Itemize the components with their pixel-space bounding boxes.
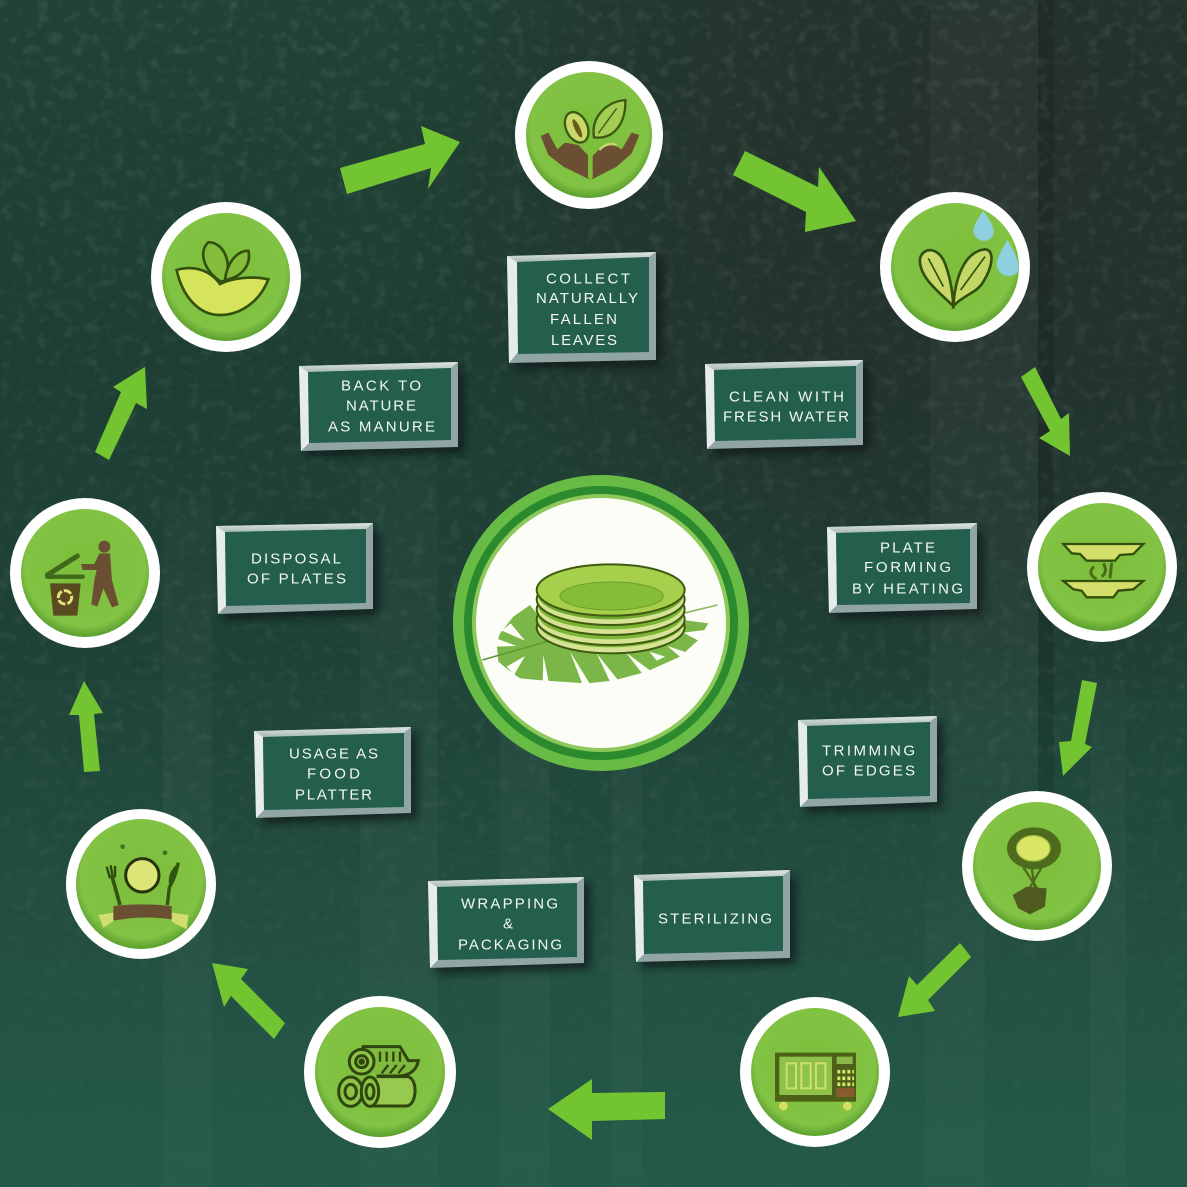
step 4 icon: trimming	[962, 791, 1112, 941]
label: disposal of plates: DISPOSAL	[251, 550, 341, 568]
label: trimming of edges: OF EDGES	[822, 762, 915, 780]
step 3 icon: plate forming press	[1027, 492, 1177, 642]
arrow: step 4 to step 5	[898, 943, 971, 1017]
step 6 icon: wrapped rolls	[304, 996, 456, 1148]
label: back to nature as manure: NATURE	[346, 398, 416, 414]
label: trimming of edges: TRIMMING	[822, 742, 915, 760]
label: clean with fresh water: CLEAN WITH	[729, 388, 844, 406]
label: usage as food platter: FOOD	[307, 766, 360, 782]
arrow: step 9 to step 1	[340, 126, 460, 194]
label: usage as food platter	[254, 727, 417, 824]
label: plate forming by heating	[827, 523, 983, 619]
arrow: step 7 to step 8	[69, 681, 103, 772]
arrow: step 5 to step 6	[548, 1079, 665, 1140]
label: collect naturally fallen leaves: FALLEN	[550, 311, 617, 328]
step 5 icon: sterilizing microwave	[740, 997, 890, 1147]
label: disposal of plates	[216, 523, 379, 620]
label: wrapping and packaging: PACKAGING	[458, 936, 562, 954]
label: clean with fresh water: FRESH WATER	[723, 408, 849, 426]
label: disposal of plates: OF PLATES	[247, 570, 346, 588]
arrow: step 1 to step 2	[733, 151, 856, 232]
plate stack	[537, 564, 685, 653]
arrow: step 8 to step 9	[95, 367, 147, 460]
label: sterilizing: STERILIZING	[658, 910, 772, 928]
label: back to nature as manure: BACK TO	[341, 378, 421, 394]
label: collect naturally fallen leaves: COLLECT	[546, 270, 630, 288]
label: back to nature as manure: AS MANURE	[328, 418, 435, 436]
step 9 icon: bowl of compost with leaves	[151, 202, 301, 352]
label: plate forming by heating: BY HEATING	[852, 580, 963, 598]
label: collect naturally fallen leaves: NATURALLY	[536, 290, 638, 307]
label: wrapping and packaging: WRAPPING	[461, 896, 558, 912]
label: wrapping and packaging: &	[503, 916, 513, 932]
step 7 icon: plate, fork, knife and banner	[66, 809, 216, 959]
label: back to nature as manure	[299, 362, 464, 457]
label: sterilizing	[634, 870, 796, 968]
step 8 icon: person using recycling bin	[10, 498, 160, 648]
label: collect naturally fallen leaves	[507, 252, 662, 369]
center emblem: plates on leaf	[453, 475, 749, 771]
arrow: step 6 to step 7	[212, 963, 285, 1039]
arrow: step 3 to step 4	[1059, 680, 1097, 776]
label: usage as food platter: PLATTER	[295, 786, 372, 804]
label: trimming of edges	[798, 716, 943, 813]
label: clean with fresh water	[705, 360, 869, 455]
leaf under plates	[482, 564, 717, 687]
label: collect naturally fallen leaves: LEAVES	[551, 332, 617, 349]
label: plate forming by heating: FORMING	[864, 559, 951, 576]
arrow: step 2 to step 3	[1021, 367, 1070, 456]
step 2 icon: leaves and water drops	[880, 192, 1030, 342]
step 1 icon: hands and sprout	[515, 61, 663, 209]
label: plate forming by heating: PLATE	[880, 540, 935, 556]
label: wrapping and packaging	[428, 877, 590, 974]
label: usage as food platter: USAGE AS	[289, 746, 378, 762]
